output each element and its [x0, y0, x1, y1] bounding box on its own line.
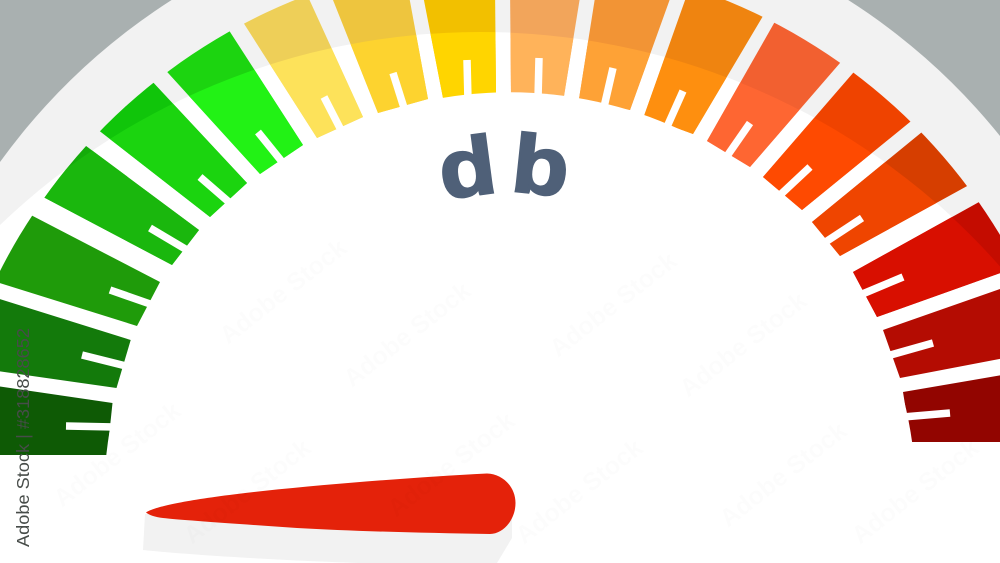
segment 2 green	[0, 296, 131, 388]
faint stock watermarks: Adobe Stock	[510, 434, 648, 550]
segment 18 darkest red	[903, 372, 1000, 442]
segment 3 green	[0, 216, 160, 326]
tick notches	[66, 58, 950, 427]
segment 12 orange	[644, 0, 762, 134]
faint stock watermarks: Adobe Stock	[846, 434, 984, 550]
segment 7 pale yellow	[244, 0, 363, 138]
letter b: b	[508, 117, 573, 214]
faint stock watermarks: Adobe Stock	[178, 434, 316, 550]
segment 6 bright green	[167, 31, 303, 174]
vertical stock credit: Adobe Stock | #318828652	[13, 328, 33, 547]
faint stock watermarks	[48, 234, 984, 550]
inner white dial cut-out	[104, 92, 916, 563]
faint stock watermarks: Adobe Stock	[214, 234, 352, 350]
segment 14 red-orange	[763, 72, 910, 210]
segment 17 dark red	[883, 282, 1000, 378]
faint stock watermarks: Adobe Stock	[48, 397, 186, 513]
segment 9 gold	[421, 0, 496, 98]
segment 15 deep orange	[812, 132, 967, 256]
segment 1 dark green	[0, 385, 112, 455]
segment 5 green	[100, 82, 247, 217]
faint stock watermarks: Adobe Stock	[714, 417, 852, 533]
segment 4 green	[44, 146, 199, 265]
letter d: d	[433, 119, 501, 217]
faint stock watermarks: Adobe Stock	[544, 247, 682, 363]
faint stock watermarks: Adobe Stock	[338, 277, 476, 393]
unit label db	[433, 117, 573, 217]
needle shadow	[143, 500, 512, 563]
red needle	[146, 474, 516, 534]
segment 16 red	[853, 202, 1000, 317]
segment 13 coral	[707, 22, 840, 167]
segment 11 orange	[579, 0, 675, 110]
segment 10 light orange	[510, 0, 582, 96]
faint stock watermarks: Adobe Stock	[382, 407, 520, 523]
faint stock watermarks: Adobe Stock	[674, 287, 812, 403]
segment 8 yellow	[327, 0, 428, 113]
